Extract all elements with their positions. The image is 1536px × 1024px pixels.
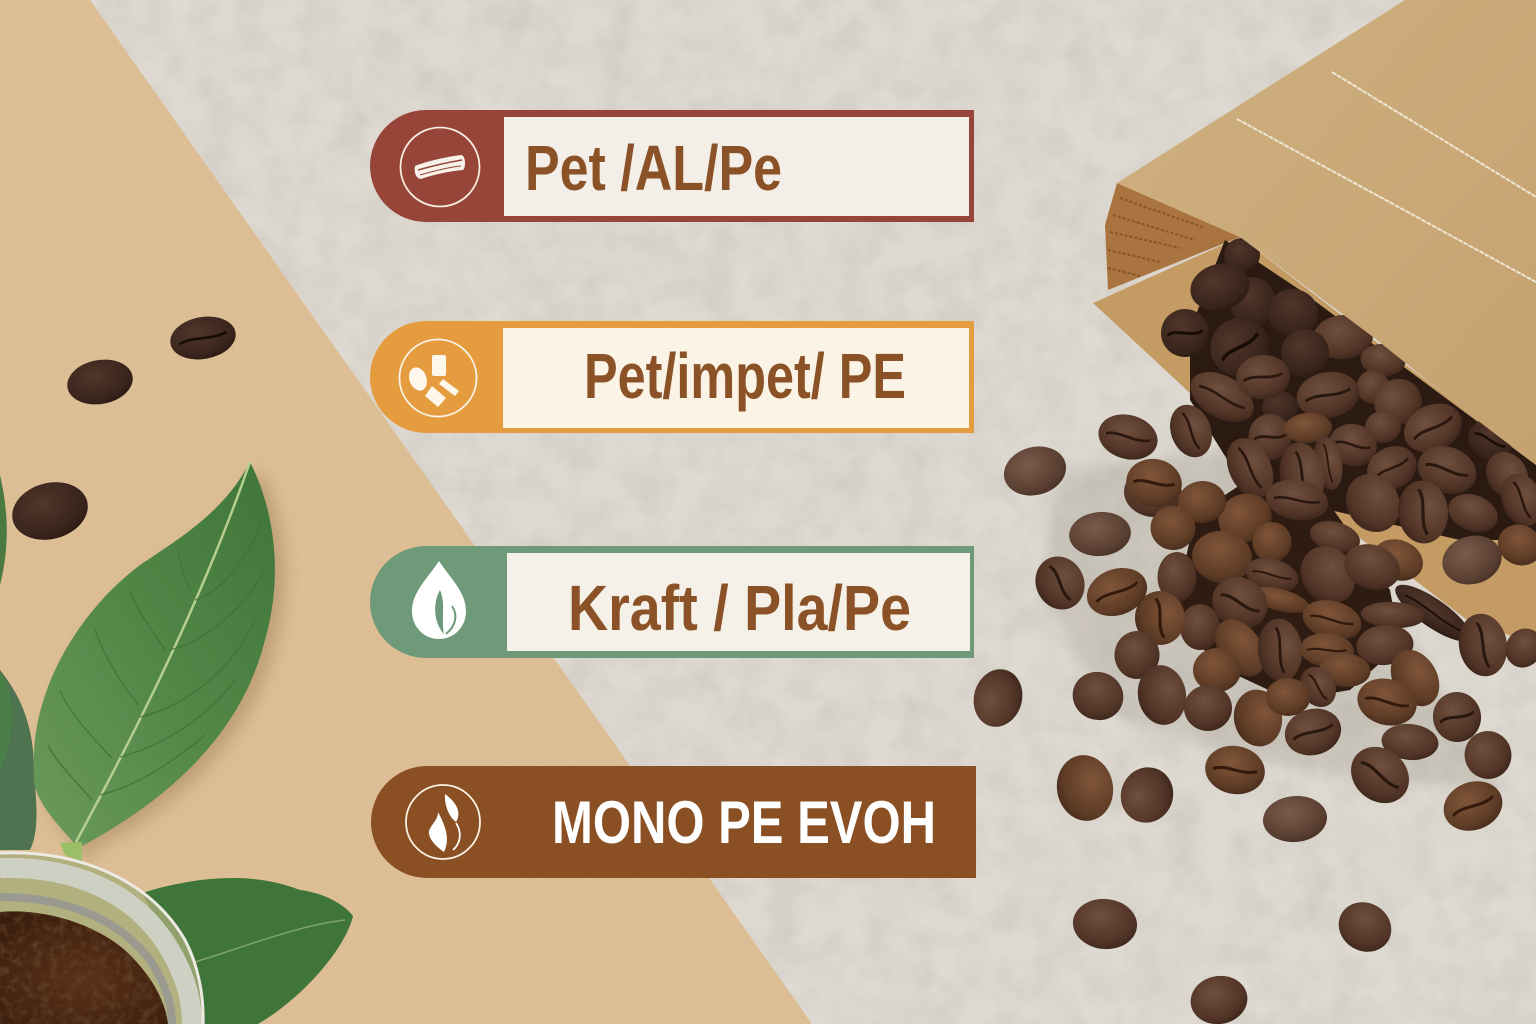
pile of coffee beans inside the bag <box>1161 238 1536 511</box>
pill 2 text: Pet/impet/ PE <box>584 340 906 412</box>
icon: flame leaves <box>406 785 480 859</box>
pill 4 background <box>371 766 976 878</box>
icon: drop with leaf <box>412 561 466 639</box>
coffee bag side gusset with print <box>1105 183 1240 290</box>
icon: pouch <box>400 128 480 206</box>
pill 4: MONO PE EVOH <box>371 766 976 878</box>
coffee bean: on kraft left <box>6 474 94 548</box>
dark gaps in spilled pile <box>1175 485 1400 700</box>
shadow under beans <box>1040 450 1500 790</box>
pill 1 text: Pet /AL/Pe <box>525 132 782 204</box>
loose coffee beans on the surface <box>967 399 1536 1024</box>
pill 3: Kraft / Pla/Pe <box>370 546 974 658</box>
bag stitched seam lower <box>1237 119 1536 282</box>
bag stitched seam upper <box>1332 72 1536 197</box>
icon: packaging shapes <box>400 340 476 416</box>
large green leaf <box>34 462 285 866</box>
pill 4 text: MONO PE EVOH <box>552 789 936 856</box>
pill 1 label panel <box>504 117 969 216</box>
pill 2: Pet/impet/ PE <box>370 321 974 433</box>
pill 2 background <box>370 321 974 433</box>
coffee bag back: interior flap <box>1093 237 1536 645</box>
small green leaf lower <box>142 878 353 1024</box>
pill 3 label panel <box>507 553 970 651</box>
dark interior of bag <box>1190 240 1536 540</box>
kraft paper sheet <box>0 0 812 1024</box>
coffee bag front panel <box>1117 0 1536 465</box>
glass jar of ground coffee <box>0 853 203 1024</box>
pill 1: Pet/AL/Pe <box>370 110 974 222</box>
coffee bean: on kraft top right <box>167 312 239 364</box>
pill 1 background <box>370 110 974 222</box>
coffee bean: on kraft middle <box>64 355 136 409</box>
pill 3 background <box>370 546 974 658</box>
pill 2 label panel <box>503 328 969 428</box>
spilled coffee beans <box>1121 464 1536 715</box>
leaves at left edge <box>0 475 36 850</box>
pill 3 text: Kraft / Pla/Pe <box>568 572 911 644</box>
